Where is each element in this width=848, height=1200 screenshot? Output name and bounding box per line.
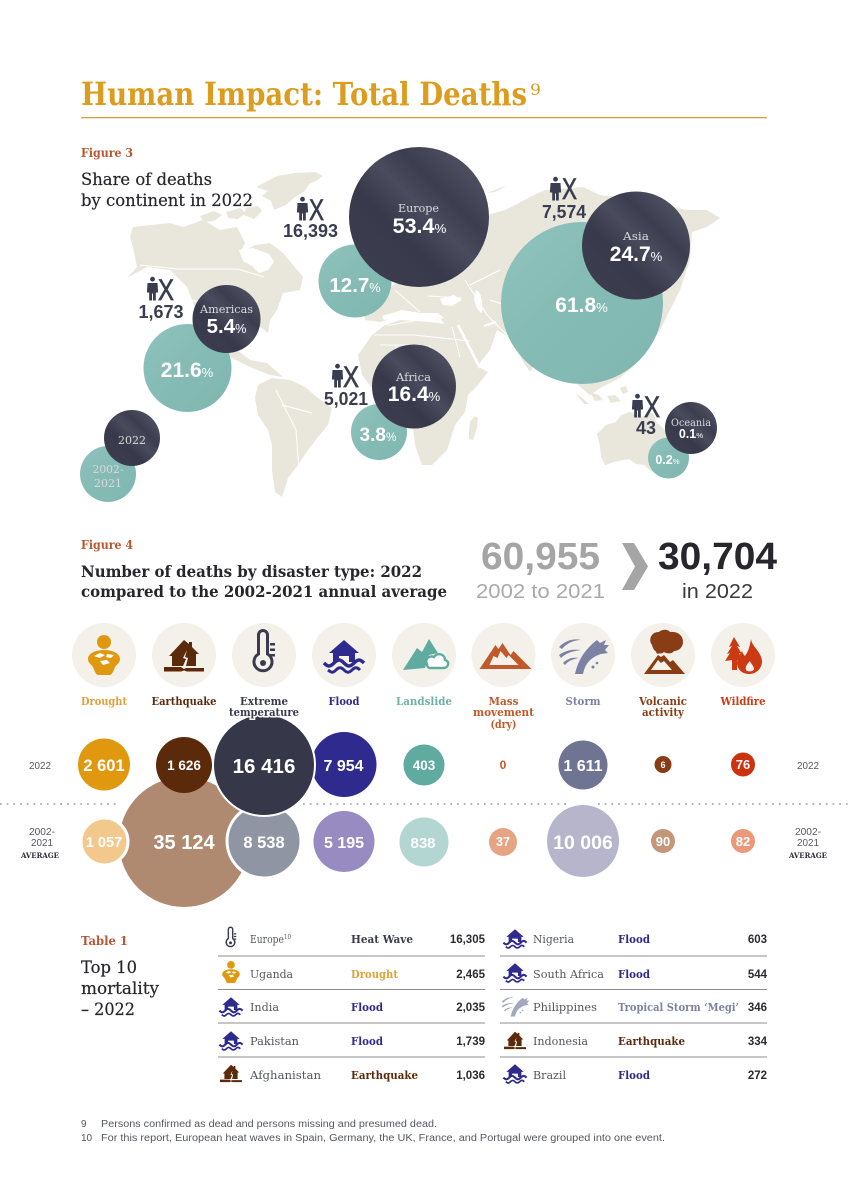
disaster type labels: movement (473, 705, 535, 719)
table: left column (219, 927, 486, 1082)
row: Europe: 10 (284, 934, 291, 941)
callout: 60,955: 60,955 (481, 536, 600, 578)
disaster type labels: temperature (229, 705, 299, 719)
row: Europe: 16,305 (450, 934, 486, 946)
row: Nigeria: 603 (748, 934, 767, 946)
row: Europe: Europe (250, 933, 284, 946)
disaster type labels: Flood (328, 694, 360, 708)
figure 3 label: Figure 3 (81, 146, 133, 160)
bubble: earthquake 2022: 1 626 (167, 758, 201, 773)
row: India: Flood (351, 1001, 383, 1014)
footnotes: Persons confirmed as dead and persons missing and presumed dead. (101, 1119, 437, 1130)
Americas bubbles: 5.4% (207, 315, 246, 338)
row: South Africa: South Africa (533, 968, 604, 981)
footnotes: 9 (81, 1119, 87, 1130)
icon: extreme temperature (232, 623, 296, 687)
icon: deaths Asia: X (562, 173, 577, 206)
Asia bubbles (501, 192, 690, 384)
callout: 60,955: 2002 to 2021 (476, 581, 605, 603)
icon: wildfire (711, 623, 775, 687)
bubble: extreme temperature 2022 (213, 714, 315, 816)
bubble: storm 2022 (558, 740, 608, 790)
row: Afghanistan (220, 1065, 485, 1082)
bubble: wildfire average (731, 829, 755, 853)
footnotes: For this report, European heat waves in Spain, Germany, the UK, France, and Portugal were grouped into one event. (101, 1133, 665, 1144)
icon: deaths Americas: 1,673 (138, 302, 184, 322)
Asia bubbles: Asia (622, 229, 649, 243)
bubble: volcanic average: 90 (656, 834, 670, 849)
figure 3 heading: Share of deaths (81, 170, 212, 189)
row: India (219, 997, 486, 1016)
figure 4 heading: compared to the 2002-2021 annual average (81, 582, 447, 601)
row labels right (788, 760, 827, 860)
row: Uganda: 2,465 (456, 969, 486, 981)
footnotes (81, 1119, 665, 1144)
table: right column (502, 929, 768, 1083)
bubble: drought average: 1 057 (86, 835, 122, 851)
bubble: storm average: 10 006 (553, 832, 613, 854)
Asia bubbles: 61.8% (555, 294, 608, 317)
row: South Africa: 544 (748, 969, 768, 981)
bubble: landslide average: 838 (410, 835, 436, 852)
row: India: 2,035 (456, 1002, 486, 1014)
disaster type labels: Drought (81, 694, 128, 708)
bubble: extreme temperature average: 8 538 (243, 834, 285, 852)
title: 9 (530, 80, 541, 99)
row labels left: 2022 (29, 760, 51, 772)
bubble: flood average: 5 195 (324, 835, 364, 852)
footnotes: 10 (81, 1133, 93, 1144)
row: Philippines: Philippines (533, 1001, 597, 1014)
disaster type labels: (dry) (490, 717, 516, 731)
bubble: extreme temperature 2022: 16 416 (233, 755, 295, 778)
icon: landslide (392, 623, 456, 687)
world map (127, 172, 720, 497)
icon: deaths Oceania (632, 391, 660, 438)
table heading: – 2022 (81, 1000, 135, 1019)
title: Human Impact: Total Deaths (81, 75, 527, 113)
row: South Africa: Flood (618, 968, 650, 981)
icon: deaths Africa (324, 361, 368, 409)
Europe bubbles: 12.7% (329, 274, 381, 297)
row labels right: AVERAGE (788, 851, 827, 860)
row: Pakistan (219, 1031, 485, 1050)
Americas bubbles: Americas (199, 302, 253, 316)
row: Indonesia: Earthquake (618, 1035, 685, 1048)
row labels right: 2022 (797, 760, 819, 772)
bubble: earthquake 2022 (156, 737, 212, 793)
bubble: landslide 2022 (404, 744, 444, 786)
Americas bubbles: 21.6% (161, 359, 214, 382)
Europe bubbles (318, 147, 489, 318)
row: Nigeria: Nigeria (533, 933, 574, 946)
row: Brazil: Brazil (533, 1069, 566, 1082)
title (81, 75, 767, 118)
icon: mass movement (472, 623, 536, 687)
disaster type labels (81, 694, 766, 731)
icon: deaths Americas (138, 274, 184, 322)
table heading (81, 958, 160, 1019)
icon: deaths Asia (542, 173, 586, 222)
bubble: drought 2022: 2 601 (83, 757, 125, 775)
row: Indonesia: 334 (748, 1036, 768, 1048)
row labels right: 2002- (795, 826, 821, 838)
Oceania bubbles (648, 402, 717, 478)
icon: deaths Americas: X (158, 274, 174, 307)
icon: deaths Oceania: X (644, 391, 660, 424)
disaster type labels: Earthquake (152, 694, 216, 708)
row: Uganda: Uganda (250, 968, 293, 981)
row: Afghanistan: Afghanistan (249, 1069, 321, 1082)
Americas bubbles (144, 285, 260, 412)
bubble: volcanic 2022: 6 (660, 760, 666, 770)
icon: storm (551, 623, 615, 687)
figure 4 heading: Number of deaths by disaster type: 2022 (81, 562, 422, 581)
icon: earthquake (152, 623, 216, 687)
row labels left: 2021 (31, 837, 53, 849)
disaster type labels: Storm (566, 694, 600, 708)
disaster type labels: Extreme (240, 694, 288, 708)
bubble: wildfire 2022 (731, 752, 755, 776)
row: Philippines: 346 (748, 1002, 767, 1014)
Europe bubbles: 53.4% (393, 214, 446, 238)
Africa bubbles: 3.8% (360, 425, 397, 446)
bubble: flood average (314, 811, 374, 872)
figure 3 heading: by continent in 2022 (81, 191, 253, 210)
Oceania bubbles: 0.2% (655, 453, 680, 467)
row: Pakistan: Pakistan (250, 1035, 299, 1048)
bubble: storm 2022: 1 611 (563, 758, 603, 775)
row labels right: 2021 (797, 837, 819, 849)
row: Afghanistan: 1,036 (456, 1070, 485, 1082)
legend circles: 2022 (118, 433, 146, 447)
legend circles: 2002- (92, 462, 124, 476)
figure 4 heading (81, 562, 447, 601)
row: South Africa (503, 963, 768, 982)
icon: deaths Africa: X (343, 361, 359, 394)
Oceania bubbles: 0.1% (679, 427, 703, 441)
figure 4 label: Figure 4 (81, 538, 133, 552)
callout: 30,704: in 2022 (682, 581, 753, 603)
disaster type labels: Landslide (396, 694, 452, 708)
row: Uganda: Drought (351, 968, 399, 981)
bubble: storm average (547, 805, 619, 877)
row: Philippines (502, 997, 767, 1016)
bubble: earthquake average (119, 777, 249, 907)
Africa bubbles: Africa (395, 370, 431, 384)
icon: deaths Oceania: 43 (636, 418, 656, 438)
bubble: wildfire 2022: 76 (736, 757, 750, 772)
disaster type labels: Wildfire (720, 694, 766, 708)
row: Brazil (503, 1064, 767, 1083)
icon: deaths Europe (283, 194, 338, 241)
row: Philippines: Tropical Storm ‘Megi’ (618, 1001, 739, 1014)
Africa bubbles (351, 344, 456, 460)
row: Indonesia (504, 1032, 768, 1049)
row: Brazil: 272 (748, 1070, 767, 1082)
Asia bubbles: 24.7% (610, 243, 663, 266)
icon: volcanic activity (631, 623, 695, 687)
icon: flood (312, 623, 376, 687)
bubble: extreme temperature average (227, 804, 301, 878)
bubble: drought average (81, 818, 128, 865)
disaster type labels: activity (642, 705, 684, 719)
bubble: earthquake average: 35 124 (153, 832, 215, 854)
icon: deaths Europe: 16,393 (283, 221, 338, 241)
legend circles (80, 410, 160, 502)
Africa bubbles: 16.4% (388, 383, 441, 406)
icon: deaths Africa: 5,021 (324, 389, 368, 409)
row labels left: 2002- (29, 826, 55, 838)
row: Pakistan: Flood (351, 1035, 383, 1048)
bubble: volcanic 2022 (654, 756, 672, 773)
bubble: mass movement average: 37 (496, 835, 510, 849)
callout: 60,955 (476, 536, 605, 603)
row: Afghanistan: Earthquake (351, 1069, 418, 1082)
row: Europe: Heat Wave (351, 933, 413, 946)
row: Brazil: Flood (618, 1069, 650, 1082)
figure 3 heading (81, 170, 253, 210)
icon: deaths Asia: 7,574 (542, 202, 586, 222)
bubble: mass movement 2022: 0 (500, 758, 507, 772)
legend circles: 2021 (94, 476, 122, 490)
row: Nigeria: Flood (618, 933, 650, 946)
Oceania bubbles: Oceania (671, 418, 711, 429)
bubble: landslide average (400, 818, 448, 866)
row: Nigeria (503, 929, 767, 948)
callout: 30,704 (658, 536, 777, 603)
bubble: drought 2022 (78, 738, 130, 790)
icon: deaths Europe: X (309, 194, 324, 227)
callout: 30,704: 30,704 (658, 536, 777, 578)
Europe bubbles: Europe (398, 201, 439, 215)
row: Pakistan: 1,739 (456, 1036, 485, 1048)
row labels left: AVERAGE (20, 851, 59, 860)
bubble: wildfire average: 82 (736, 834, 750, 849)
bubble: landslide 2022: 403 (413, 758, 436, 773)
bubble: flood 2022: 7 954 (323, 758, 364, 775)
row: Uganda (222, 961, 486, 983)
bubble: flood 2022 (312, 732, 376, 797)
disaster type labels: Mass (488, 694, 518, 708)
arrow: chevron (622, 543, 648, 590)
bubble: mass movement average (489, 828, 517, 856)
disaster type labels: Volcanic (638, 694, 687, 708)
row labels left (20, 760, 59, 860)
icon: drought (72, 623, 136, 687)
table heading: Top 10 (81, 958, 137, 977)
bubble: volcanic average (651, 829, 675, 853)
table label: Table 1 (81, 934, 128, 948)
table heading: mortality (81, 979, 160, 998)
row: India: India (250, 1001, 279, 1014)
row: Indonesia: Indonesia (533, 1035, 588, 1048)
row: Europe (226, 927, 486, 947)
